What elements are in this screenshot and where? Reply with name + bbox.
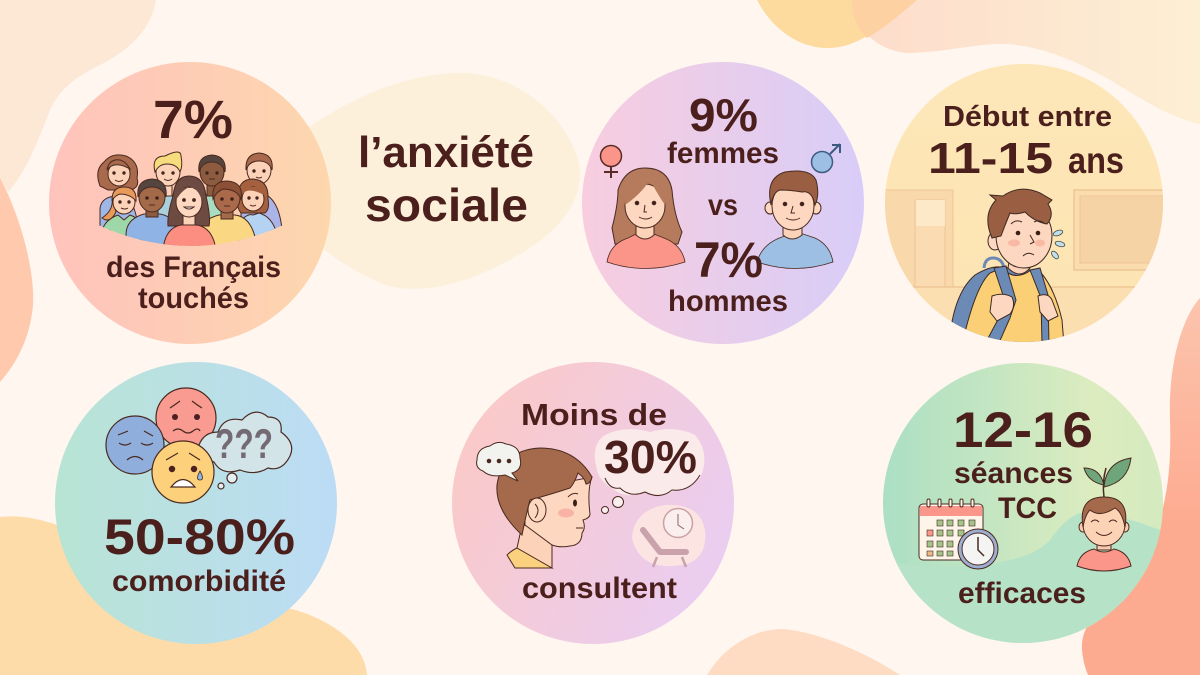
icon: child with sprout xyxy=(1077,458,1131,571)
heading: début entre: Début entre xyxy=(943,101,1112,133)
stat: 7% hommes: hommes xyxy=(668,285,788,318)
icon: speech bubble xyxy=(477,442,521,481)
title: l’anxiété xyxy=(358,128,534,177)
panel: 7% des Français xyxy=(49,62,331,344)
stat: 11-15 ans: 11-15 xyxy=(928,134,1053,183)
icon: woman xyxy=(607,168,685,268)
icon: calendar and clock xyxy=(919,499,998,569)
stat: 7% hommes xyxy=(668,232,788,318)
title xyxy=(358,128,534,231)
label: des Français touchés: des Français xyxy=(106,251,281,284)
panel: moins de 30% consultent xyxy=(452,362,734,644)
stat: 7% hommes: 7% xyxy=(694,232,763,288)
label: séances TCC xyxy=(954,457,1073,525)
stat: 12-16: 12-16 xyxy=(953,402,1093,458)
panel: femmes vs hommes xyxy=(582,62,864,344)
icon: crowd of people xyxy=(97,152,282,246)
illustration: school background xyxy=(885,188,1163,342)
label: des Français touchés: touchés xyxy=(138,282,249,315)
stat: 7%: 7% xyxy=(153,90,233,150)
stat: 9% femmes xyxy=(667,89,779,170)
label: efficaces: efficaces xyxy=(958,577,1086,610)
icon: female symbol xyxy=(600,146,622,178)
label: vs: vs xyxy=(708,189,738,222)
thought cloud xyxy=(595,429,704,514)
stat: 50-80%: 50-80% xyxy=(104,509,295,565)
title blob xyxy=(305,73,580,289)
face: blue sad xyxy=(106,416,164,474)
panel: 12-16 séances TCC xyxy=(880,363,1165,650)
stat: 9% femmes: 9% xyxy=(689,89,758,141)
title: sociale xyxy=(365,179,528,231)
label: des Français touchés xyxy=(106,251,281,315)
panel: comorbidité xyxy=(55,362,337,644)
label: consultent: consultent xyxy=(522,572,677,605)
label: séances TCC: séances xyxy=(954,457,1073,490)
panel: début entre 11-15 ans xyxy=(880,64,1170,357)
icon: male symbol xyxy=(812,144,840,172)
icon: man xyxy=(757,171,833,268)
icon: sad faces and thought cloud xyxy=(106,388,292,503)
label: séances TCC: TCC xyxy=(998,492,1057,525)
stat: 11-15 ans: ans xyxy=(1068,140,1124,181)
label: comorbidité: comorbidité xyxy=(112,565,286,598)
stat: 9% femmes: femmes xyxy=(667,137,779,170)
stat: 30%: 30% xyxy=(604,431,697,483)
stat: 11-15 ans xyxy=(928,134,1124,183)
icon: therapy chair and clock xyxy=(632,505,705,567)
icon: head in profile xyxy=(497,448,592,568)
thought cloud with question marks: ??? xyxy=(215,420,273,467)
illustration: worried boy with backpack xyxy=(950,189,1064,345)
thought cloud with question marks xyxy=(199,412,292,489)
face: yellow crying xyxy=(152,441,214,503)
heading: moins de: Moins de xyxy=(521,397,667,432)
face: red worried xyxy=(156,388,216,448)
icon: sweat drops xyxy=(1050,229,1065,260)
